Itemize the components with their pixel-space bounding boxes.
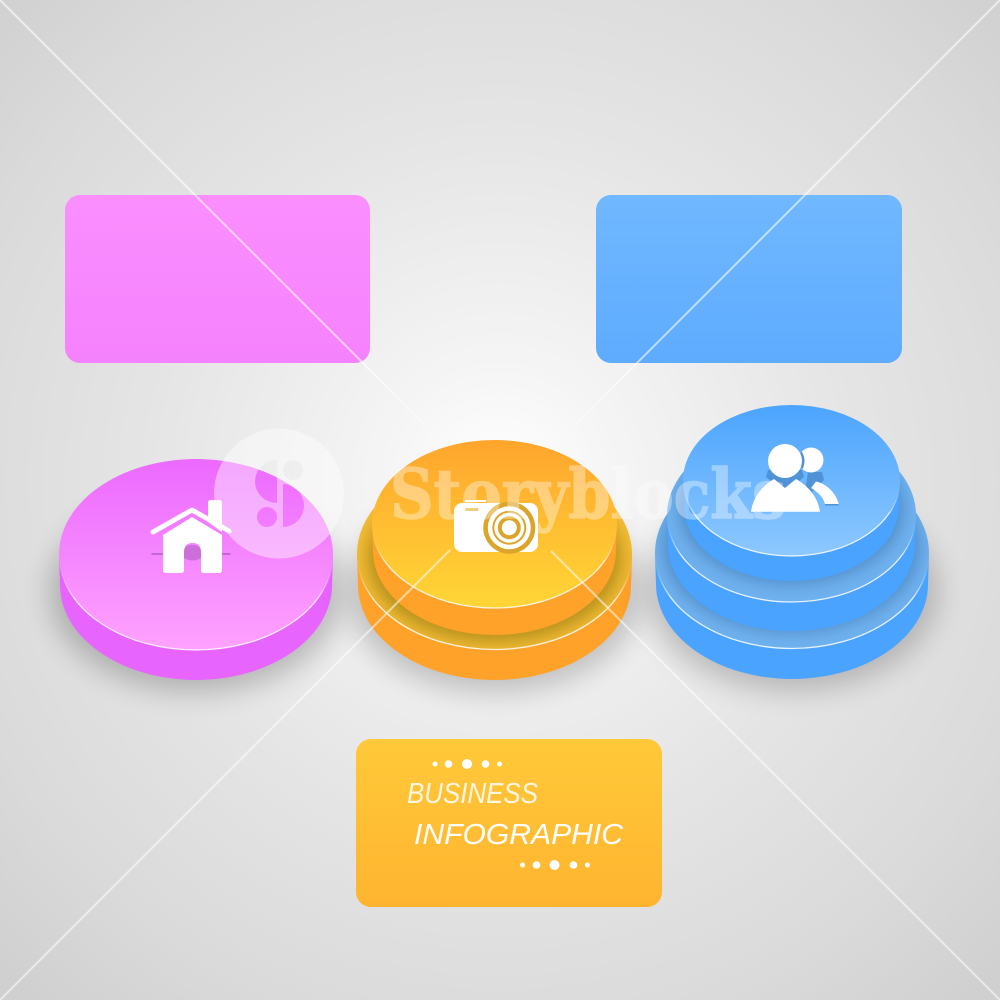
icon: people xyxy=(751,444,839,512)
decorative dots bottom xyxy=(520,860,590,870)
panel: pink single-layer disc xyxy=(50,459,342,692)
panel: yellow title card xyxy=(356,739,662,907)
heading: INFOGRAPHIC: INFOGRAPHIC xyxy=(414,819,624,851)
watermark: wordmark: Storyblocks xyxy=(390,455,786,535)
icon: house xyxy=(152,500,230,573)
decorative dots top xyxy=(432,759,502,769)
icon: camera xyxy=(454,500,538,554)
heading: BUSINESS: BUSINESS xyxy=(407,778,539,810)
panel: blue card xyxy=(596,195,902,363)
panel: pink card xyxy=(65,195,370,363)
panel: blue three-layer disc xyxy=(646,405,938,691)
watermark: round logo xyxy=(214,428,344,558)
panel: orange two-layer disc xyxy=(348,440,640,692)
